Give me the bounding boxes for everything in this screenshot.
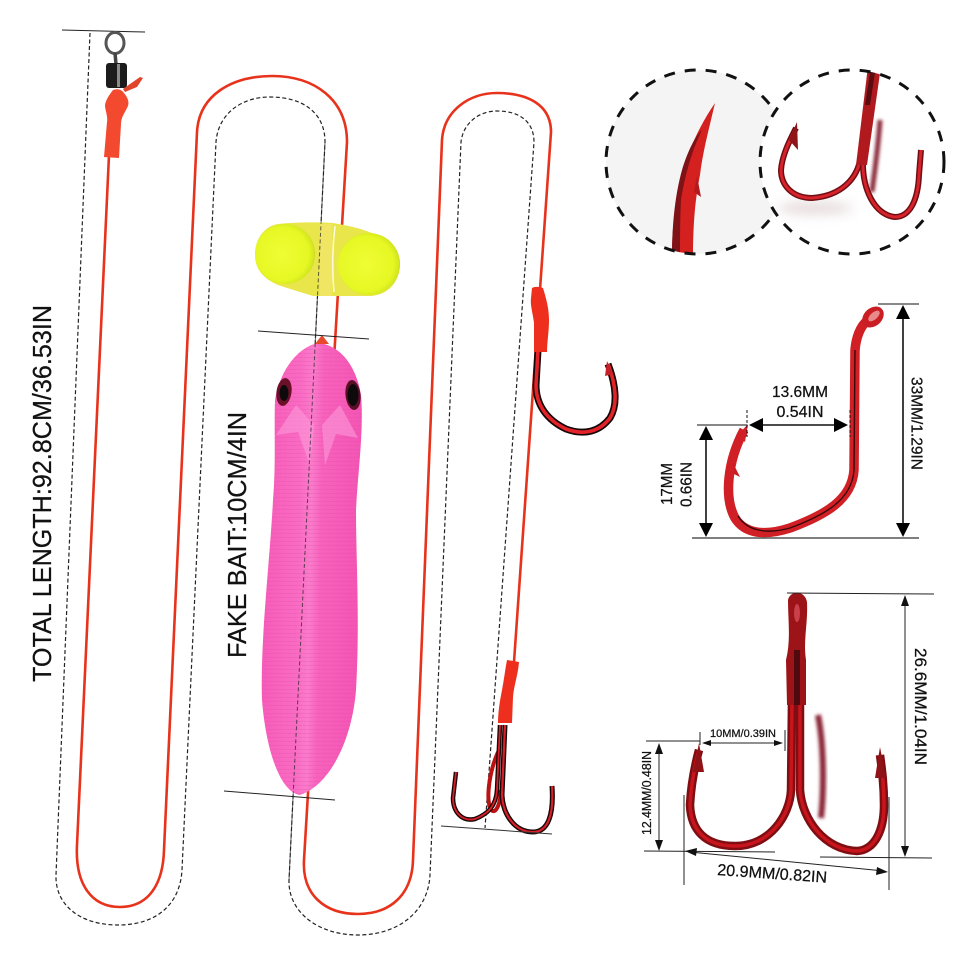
large single hook [729,302,888,533]
large hook dimension lines [692,304,919,538]
label: 17MM: 17MM [659,463,676,505]
red leader line [77,76,551,914]
hook eye [858,302,888,332]
icon: swivel and sleeve [104,32,143,158]
treble sleeve [498,660,519,723]
label: 33MM/1.29IN: 33MM/1.29IN [908,377,924,470]
label: 12.4MM/0.48IN: 12.4MM/0.48IN [639,751,654,835]
fake bait label: FAKE BAIT:10CM/4IN [222,412,252,658]
pink fake bait lure [262,335,362,795]
yellow float [255,222,400,296]
treble shank and eye [786,593,807,705]
label: 26.6MM/1.04IN: 26.6MM/1.04IN [911,648,929,765]
treble baseline [441,826,552,834]
detail circle: hook point [606,70,790,258]
left eye [275,377,293,407]
label: 13.6MM: 13.6MM [772,384,828,401]
detail circle: treble close-up [760,66,944,254]
dashed overlay across bait [289,142,325,880]
large treble hook [690,593,886,851]
hook sleeve [531,287,549,352]
treble hook on leader [453,660,552,832]
top measurement line [62,30,145,32]
total length label: TOTAL LENGTH:92.8CM/36.53IN [27,305,57,682]
label: 0.54IN: 0.54IN [776,404,824,421]
lure nose tip [315,335,329,344]
label: 20.9MM/0.82IN: 20.9MM/0.82IN [717,862,828,887]
right eye [344,379,362,411]
single hook on leader [531,287,615,432]
treble dimension lines [644,593,934,890]
label: 10MM/0.39IN: 10MM/0.39IN [710,728,776,740]
label: 0.66IN: 0.66IN [678,462,696,507]
dashed measurement outline [56,33,534,935]
bait measurement lines [224,331,369,800]
